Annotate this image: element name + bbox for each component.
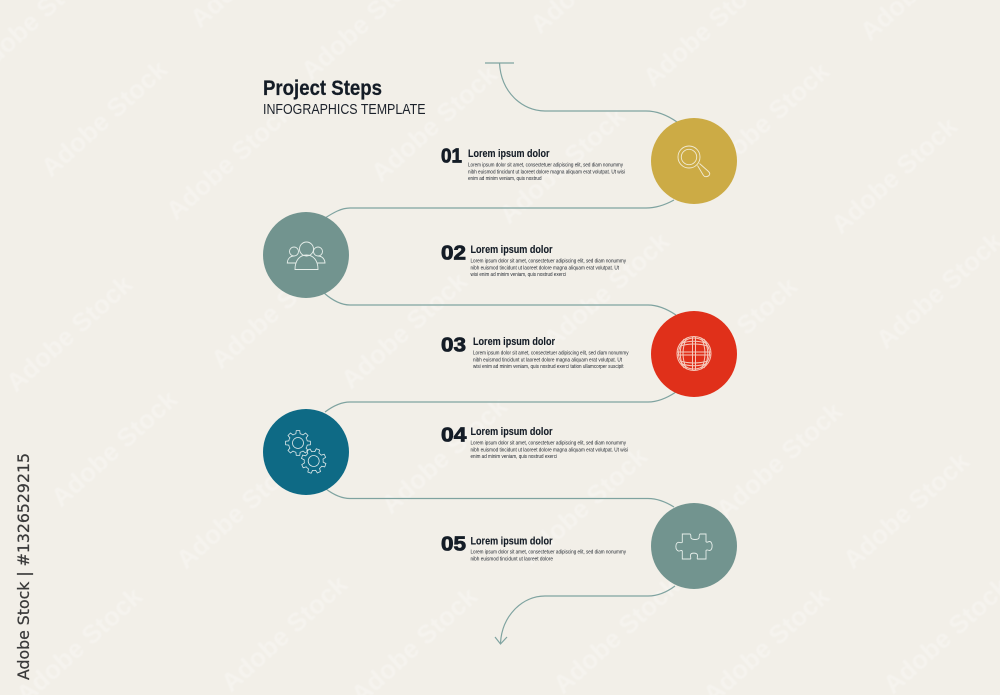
heading 03: Lorem ipsum dolor <box>473 336 556 348</box>
body 04: enim ad minim veniam, quis nostrud exerci <box>470 454 557 460</box>
body 02 <box>470 258 626 278</box>
body 01 <box>468 162 625 182</box>
step 02 text <box>441 242 626 278</box>
watermark pattern: Adobe Stock <box>205 246 343 375</box>
watermark pattern: Adobe Stock <box>215 569 353 695</box>
body 02: nibh euismod tincidunt ut laoreet dolore magna aliquam erat volutpat. Ut <box>470 266 619 272</box>
title block <box>263 76 426 118</box>
number 03: 03 <box>441 334 466 356</box>
step 05 text <box>441 532 626 563</box>
body 01: enim ad minim veniam, quis nostrud <box>468 176 542 182</box>
icon: people <box>287 242 325 270</box>
step 01 circle with magnifier icon <box>651 118 737 204</box>
step 01 text <box>441 144 625 182</box>
watermark pattern: Adobe Stock <box>35 54 173 183</box>
watermark pattern: Adobe Stock <box>537 226 675 355</box>
step 03 text <box>441 334 629 370</box>
heading 05: Lorem ipsum dolor <box>470 535 553 547</box>
step 04 circle with gears icon <box>263 409 349 495</box>
watermark pattern: Adobe Stock <box>710 396 848 525</box>
step 03 circle with globe icon <box>651 311 737 397</box>
watermark pattern: Adobe Stock <box>493 101 631 230</box>
heading 04: Lorem ipsum dolor <box>470 426 553 438</box>
stock id side label: Adobe Stock | #1326529215 <box>14 453 33 680</box>
body 03 <box>472 350 629 370</box>
icon: globe <box>677 336 711 370</box>
watermark pattern: Adobe Stock <box>335 266 473 395</box>
step 04 text <box>441 424 628 460</box>
heading 02: Lorem ipsum dolor <box>470 244 553 256</box>
body 04: nibh euismod tincidunt ut laoreet dolore magna aliquam erat volutpat. Ut wisi <box>470 448 628 454</box>
body 02: Lorem ipsum dolor sit amet, consectetuer adipiscing elit, sed diam nonummy <box>470 258 626 264</box>
watermark pattern: Adobe Stock <box>0 269 138 398</box>
watermark pattern: Adobe Stock <box>45 384 183 513</box>
body 02: wisi enim ad minim veniam, quis nostrud exerci <box>470 272 566 278</box>
body 05: nibh euismod tincidunt ut laoreet dolore <box>470 557 553 563</box>
body 01: nibh euismod tincidunt ut laoreet dolore magna aliquam erat volutpat. Ut wisi <box>468 170 625 176</box>
heading 01: Lorem ipsum dolor <box>468 148 550 160</box>
number 01: 01 <box>441 144 462 168</box>
winding connector line with start bar and end arrow <box>324 63 677 644</box>
step 02 circle with people icon <box>263 212 349 298</box>
body 01: Lorem ipsum dolor sit amet, consectetuer adipiscing elit, sed diam nonummy <box>468 162 623 168</box>
watermark pattern: Adobe Stock <box>170 446 308 575</box>
body 03: Lorem ipsum dolor sit amet, consectetuer adipiscing elit, sed diam nonummy <box>473 350 629 356</box>
heading: Project Steps <box>263 76 382 100</box>
number 04: 04 <box>441 424 467 446</box>
watermark pattern: Adobe Stock <box>837 446 975 575</box>
watermark pattern: Adobe Stock <box>515 441 653 570</box>
body 05: Lorem ipsum dolor sit amet, consectetuer adipiscing elit, sed diam nonummy <box>470 550 626 556</box>
body 03: wisi enim ad minim veniam, quis nostrud exerci tation ullamcorper suscipit <box>472 364 624 370</box>
body 05 <box>470 550 626 563</box>
icon: magnifier <box>678 146 710 177</box>
body 04: Lorem ipsum dolor sit amet, consectetuer adipiscing elit, sed diam nonummy <box>470 440 626 446</box>
body 03: nibh euismod tincidunt ut laoreet dolore magna aliquam erat volutpat. Ut <box>473 358 622 364</box>
number 02: 02 <box>441 242 466 264</box>
icon: gears <box>286 431 330 477</box>
watermark pattern: Adobe Stock <box>160 97 298 226</box>
icon: puzzle piece <box>676 534 712 559</box>
subheading: INFOGRAPHICS TEMPLATE <box>263 102 426 118</box>
watermark pattern: Adobe Stock <box>825 111 963 240</box>
step 05 circle with puzzle icon <box>651 503 737 589</box>
watermark pattern: Adobe Stock <box>375 391 513 520</box>
number 05: 05 <box>441 532 466 556</box>
body 04 <box>470 440 628 460</box>
watermark pattern: Adobe Stock <box>697 56 835 185</box>
watermark pattern: Adobe Stock <box>365 59 503 188</box>
watermark pattern: Adobe Stock <box>665 271 803 400</box>
